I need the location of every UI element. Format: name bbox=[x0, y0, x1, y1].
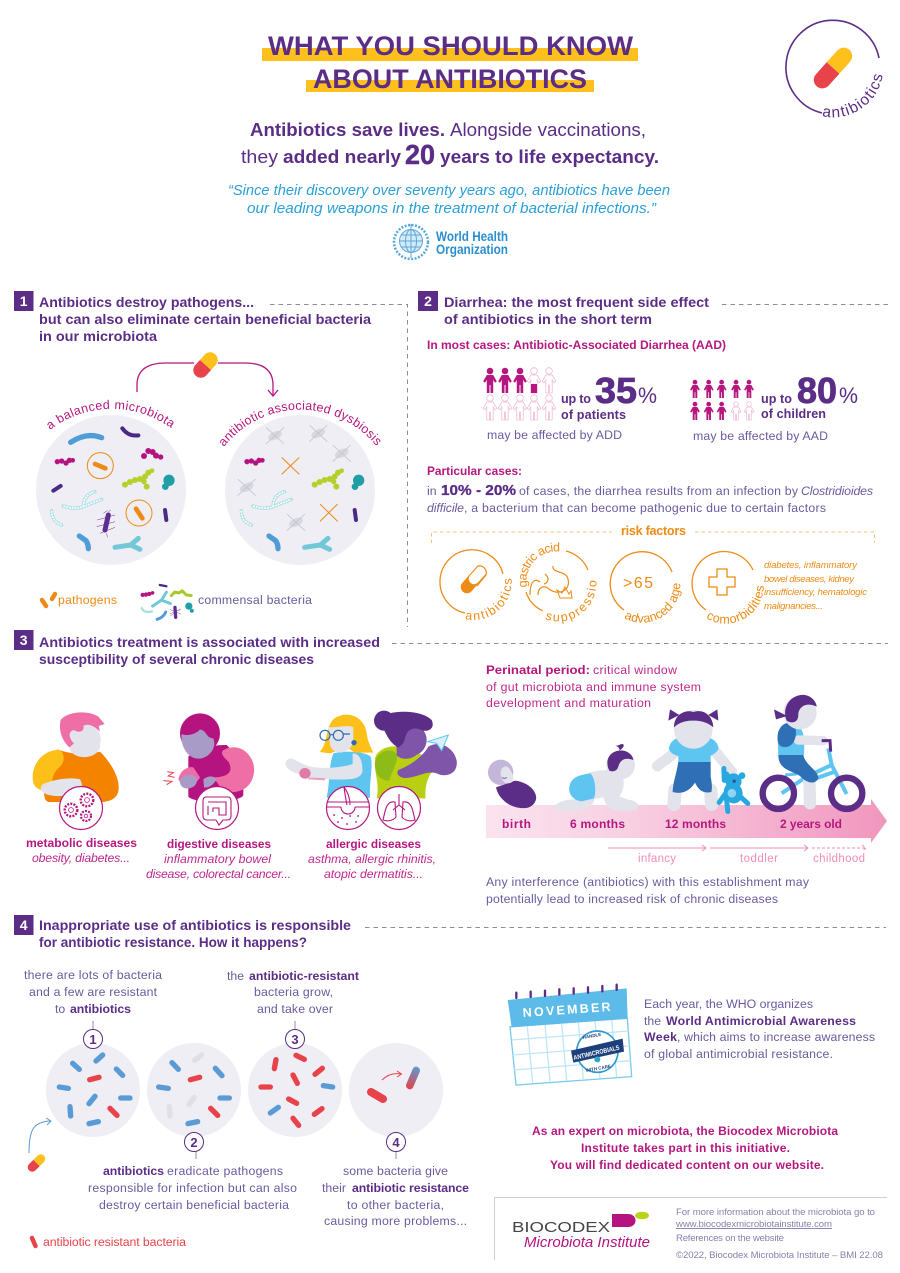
step 1 circle: 1 bbox=[89, 1032, 97, 1047]
number badge 2 bbox=[418, 291, 438, 311]
text: C. difficile: of cases, the diarrhea results from an infection by bbox=[519, 484, 799, 498]
text: perinatal period: critical window bbox=[593, 663, 677, 677]
heading 1 bbox=[39, 294, 371, 344]
risk: advanced age: >65 bbox=[623, 575, 653, 592]
number badge 4: 4 bbox=[20, 917, 28, 933]
illustration: toddler with teddy bbox=[657, 709, 753, 813]
text: C. difficile: , a bacterium that can become pathogenic due to certain factors bbox=[464, 501, 826, 515]
subtitle bbox=[241, 120, 659, 170]
stat: up to 35% of patients bbox=[487, 370, 657, 442]
illustration: child on bike bbox=[763, 695, 862, 809]
title: WHAT YOU SHOULD KNOW bbox=[268, 31, 634, 61]
illustration: newborn bbox=[488, 760, 536, 808]
number badge 3 bbox=[14, 630, 34, 650]
step 2 text: responsible for infection but can also bbox=[88, 1181, 297, 1195]
footer text: References on the website bbox=[676, 1233, 784, 1244]
title bbox=[262, 31, 638, 94]
text: comorbidities list: malignancies... bbox=[764, 601, 823, 612]
text: comorbidities list: bowel diseases, kidney bbox=[764, 574, 855, 585]
text: awareness week: World Antimicrobial Awareness bbox=[666, 1014, 856, 1028]
risk: antibiotics: antibiotics bbox=[466, 578, 512, 620]
text: perinatal period: development and maturation bbox=[486, 696, 651, 710]
illustration: crawling baby bbox=[555, 744, 638, 812]
text: metabolic diseases: metabolic diseases bbox=[26, 836, 137, 850]
stat: up to 35% of patients: % bbox=[638, 383, 657, 408]
text: interference bbox=[486, 875, 810, 906]
calendar: ANTIMICROBIALS bbox=[573, 1044, 621, 1062]
arrow and pill: antibiotics enter bbox=[26, 1118, 51, 1174]
risk: comorbidities: comorbidities bbox=[707, 586, 764, 624]
text: perinatal period: of gut microbiota and immune system bbox=[486, 680, 701, 694]
text: comorbidities list: diabetes, inflammatory bbox=[764, 560, 858, 571]
step 2 circle: 2 bbox=[190, 1135, 198, 1150]
step 4 circle bbox=[349, 1043, 443, 1159]
logo: Biocodex Microbiota Institute bbox=[512, 1212, 650, 1251]
text: awareness week bbox=[644, 997, 875, 1061]
icon: lungs bbox=[378, 786, 420, 830]
heading 1: Antibiotics destroy pathogens... bbox=[39, 294, 254, 310]
step 4 circle: 4 bbox=[392, 1135, 400, 1150]
text: C. difficile bbox=[427, 483, 873, 515]
stat: up to 80% of children: of children bbox=[761, 407, 826, 421]
risk: advanced age: advanced age bbox=[624, 583, 682, 623]
icon: intestines bbox=[196, 786, 238, 830]
panel 3: chronic diseases bbox=[14, 630, 888, 906]
illustration: allergic diseases bbox=[286, 711, 457, 800]
step 3 text: the bbox=[227, 969, 244, 983]
timeline arrow: 2 years old bbox=[780, 817, 842, 831]
stat: up to 35% of patients: 35 bbox=[595, 370, 637, 411]
text: C. difficile: difficile bbox=[427, 501, 464, 515]
arrow: from balanced to dysbiosis bbox=[137, 363, 278, 396]
panel 2: diarrhea bbox=[418, 291, 888, 624]
text: digestive diseases: inflammatory bowel bbox=[164, 852, 272, 866]
step 1 text bbox=[24, 968, 162, 1016]
text: metabolic diseases bbox=[26, 836, 137, 865]
step 4 text: to other bacteria, bbox=[347, 1198, 444, 1212]
text: interference: potentially lead to increased risk of chronic diseases bbox=[486, 892, 778, 906]
risk: gastric acid suppression: suppression bbox=[546, 580, 596, 624]
risk: advanced age bbox=[610, 551, 682, 623]
number badge 1 bbox=[14, 291, 34, 311]
step 3 text: antibiotic-resistant bbox=[249, 969, 359, 983]
logo: Biocodex Microbiota Institute: Microbiota Institute bbox=[524, 1234, 650, 1251]
stat: up to 80% of children: % bbox=[839, 383, 858, 408]
panel 1: pathogens and microbiota bbox=[14, 291, 408, 627]
text: perinatal period: Perinatal period: bbox=[486, 663, 590, 677]
step 1 text: and a few are resistant bbox=[29, 985, 158, 999]
heading 3: susceptibility of several chronic diseases bbox=[39, 651, 314, 667]
heading 4: for antibiotic resistance. How it happens? bbox=[39, 934, 307, 950]
stat: up to 35% of patients: up to bbox=[561, 392, 591, 406]
heading 2: Diarrhea: the most frequent side effect bbox=[444, 294, 709, 310]
title: ABOUT ANTIBIOTICS bbox=[313, 64, 587, 94]
step 3 text bbox=[227, 969, 359, 1016]
text: awareness week: , which aims to increase awareness bbox=[677, 1030, 875, 1044]
risk: gastric acid suppression: gastric acid bbox=[520, 542, 560, 587]
circle: dysbiosis: antibiotic associated dysbiosis bbox=[220, 400, 380, 446]
heading 2 bbox=[444, 294, 709, 327]
timeline arrow bbox=[486, 799, 887, 843]
footer text bbox=[675, 1207, 883, 1261]
step 1 text: antibiotics bbox=[70, 1002, 131, 1016]
icon: skin bbox=[326, 786, 370, 830]
subtitle: they bbox=[241, 147, 278, 167]
risk: antibiotics bbox=[439, 549, 512, 620]
step 2 text: antibiotics bbox=[103, 1164, 164, 1178]
number badge 2: 2 bbox=[424, 293, 432, 309]
stat: up to 80% of children: up to bbox=[761, 392, 792, 406]
heading 1: in our microbiota bbox=[39, 328, 157, 344]
quote bbox=[228, 182, 670, 217]
heading 3 bbox=[39, 634, 380, 667]
step 1 circle bbox=[46, 1021, 140, 1137]
risk factors header: risk factors bbox=[621, 524, 686, 538]
step 4 text: some bacteria give bbox=[343, 1164, 448, 1178]
step 2 text: eradicate pathogens bbox=[167, 1164, 283, 1178]
heading 1: but can also eliminate certain beneficial bacteria bbox=[39, 311, 371, 327]
subtitle: 20 bbox=[405, 139, 435, 170]
step 3 text: bacteria grow, bbox=[254, 985, 333, 999]
subtitle: years to life expectancy. bbox=[440, 147, 659, 167]
footer text: For more information about the microbiota go to bbox=[676, 1207, 875, 1218]
timeline arrow: 12 months bbox=[665, 817, 726, 831]
subheading: most cases: In most cases: Antibiotic-Associated Diarrhea (AAD) bbox=[427, 338, 726, 352]
subtitle: Antibiotics save lives. bbox=[250, 120, 445, 140]
stat: up to 35% of patients: of patients bbox=[561, 408, 626, 422]
circle: balanced microbiota: a balanced microbiota bbox=[47, 400, 174, 430]
timeline arrow: 6 months bbox=[570, 817, 625, 831]
logo: Biocodex Microbiota Institute: BIOCODEX bbox=[512, 1220, 610, 1236]
calendar: NOVEMBER bbox=[522, 1000, 611, 1020]
quote: “Since their discovery over seventy years ago, antibiotics have been bbox=[228, 182, 670, 199]
illustration: metabolic diseases bbox=[33, 712, 119, 802]
text: digestive diseases bbox=[146, 837, 291, 881]
text: initiative: You will find dedicated content on our website. bbox=[550, 1158, 824, 1172]
step 4 text bbox=[322, 1164, 469, 1228]
text: awareness week: Each year, the WHO organizes bbox=[644, 997, 813, 1011]
text: digestive diseases: disease, colorectal cancer... bbox=[146, 867, 291, 881]
heading 4: Inappropriate use of antibiotics is responsible bbox=[39, 917, 351, 933]
timeline stages: toddler bbox=[740, 853, 778, 865]
footer text: www.biocodexmicrobiotainstitute.com bbox=[675, 1219, 832, 1230]
text: allergic diseases: allergic diseases bbox=[326, 837, 421, 851]
risk factors header bbox=[432, 524, 874, 543]
number badge 4 bbox=[14, 915, 34, 935]
pictogram: 35 percent of patients bbox=[483, 368, 556, 420]
heading 4 bbox=[39, 917, 351, 950]
icon: pill bbox=[190, 349, 221, 381]
step 3 circle: 3 bbox=[291, 1032, 299, 1047]
step 1 text: to bbox=[55, 1002, 65, 1016]
step 2 circle bbox=[147, 1043, 241, 1159]
step 1 text: there are lots of bacteria bbox=[24, 968, 162, 982]
text: C. difficile: 10% - 20% bbox=[441, 483, 516, 499]
step 3 circle bbox=[248, 1021, 342, 1137]
text: comorbidities list bbox=[764, 560, 867, 612]
number badge 1: 1 bbox=[20, 293, 28, 309]
stat: up to 80% of children: 80 bbox=[797, 370, 837, 411]
text: initiative: As an expert on microbiota, the Biocodex Microbiota bbox=[532, 1124, 838, 1138]
quote: our leading weapons in the treatment of bacterial infections.” bbox=[247, 200, 657, 217]
logo: World Health Organization bbox=[394, 224, 508, 259]
heading 2: of antibiotics in the short term bbox=[444, 311, 652, 327]
heading 3: Antibiotics treatment is associated with increased bbox=[39, 634, 380, 650]
timeline arrow: birth bbox=[502, 817, 531, 831]
calendar bbox=[508, 985, 632, 1085]
text: allergic diseases: asthma, allergic rhinitis, bbox=[308, 852, 436, 866]
logo: World Health Organization: World Health bbox=[436, 229, 508, 244]
calendar: WITH CARE bbox=[585, 1064, 611, 1073]
badge: antibiotics pill: antibiotics bbox=[822, 74, 882, 118]
step 4 text: antibiotic resistance bbox=[352, 1181, 469, 1195]
timeline stages bbox=[608, 845, 866, 865]
text: initiative: Institute takes part in this initiative. bbox=[581, 1141, 790, 1155]
text: metabolic diseases: obesity, diabetes... bbox=[32, 851, 130, 865]
step 2 text: destroy certain beneficial bacteria bbox=[99, 1198, 289, 1212]
number badge 3: 3 bbox=[20, 632, 28, 648]
risk: comorbidities bbox=[691, 550, 764, 624]
text: initiative bbox=[532, 1124, 838, 1172]
legend: resistant bacteria: antibiotic resistant bacteria bbox=[43, 1235, 186, 1249]
text: awareness week: Week bbox=[644, 1030, 677, 1044]
subtitle: added nearly bbox=[283, 147, 401, 167]
circle: balanced microbiota bbox=[36, 400, 186, 565]
legend: commensal bacteria: commensal bacteria bbox=[198, 593, 312, 607]
stat: up to 80% of children bbox=[693, 370, 858, 443]
text: allergic diseases: atopic dermatitis... bbox=[324, 867, 423, 881]
text: digestive diseases: digestive diseases bbox=[167, 837, 271, 851]
text: comorbidities list: insufficiency, hematologic bbox=[764, 587, 867, 598]
illustration: digestive diseases bbox=[163, 713, 254, 802]
legend: pathogens: pathogens bbox=[58, 593, 117, 607]
circle: dysbiosis bbox=[220, 400, 380, 565]
step 4 text: causing more problems... bbox=[324, 1214, 467, 1228]
logo: World Health Organization: Organization bbox=[436, 242, 508, 257]
step 2 text bbox=[88, 1164, 297, 1212]
risk: gastric acid suppression bbox=[520, 542, 596, 624]
calendar: HANDLE bbox=[582, 1032, 602, 1040]
timeline stages: infancy bbox=[638, 853, 676, 865]
legend: commensal bacteria bbox=[140, 585, 312, 619]
timeline stages: childhood bbox=[813, 853, 865, 865]
stat: up to 35% of patients: may be affected by ADD bbox=[487, 428, 622, 442]
step 4 text: their bbox=[322, 1181, 346, 1195]
stat: up to 80% of children: may be affected by AAD bbox=[693, 429, 828, 443]
text: C. difficile: in bbox=[427, 484, 437, 498]
text: interference: Any interference (antibiotics) with this establishment may bbox=[486, 875, 810, 889]
text: C. difficile: Clostridioides bbox=[801, 484, 873, 498]
text: allergic diseases bbox=[308, 837, 436, 881]
pictogram: 80 percent of children bbox=[690, 380, 754, 420]
subtitle: Alongside vaccinations, bbox=[450, 120, 646, 140]
footer text: ©2022, Biocodex Microbiota Institute – BMI 22.08 bbox=[676, 1250, 883, 1261]
step 3 text: and take over bbox=[257, 1002, 333, 1016]
badge: antibiotics pill bbox=[785, 20, 882, 118]
text: perinatal period bbox=[486, 663, 701, 710]
panel 4: antibiotic resistance bbox=[14, 915, 887, 1261]
text: awareness week: of global antimicrobial resistance. bbox=[644, 1047, 833, 1061]
subheading: particular cases: Particular cases: bbox=[427, 464, 522, 478]
icon: gears bbox=[60, 786, 102, 830]
text: awareness week: the bbox=[644, 1014, 661, 1028]
